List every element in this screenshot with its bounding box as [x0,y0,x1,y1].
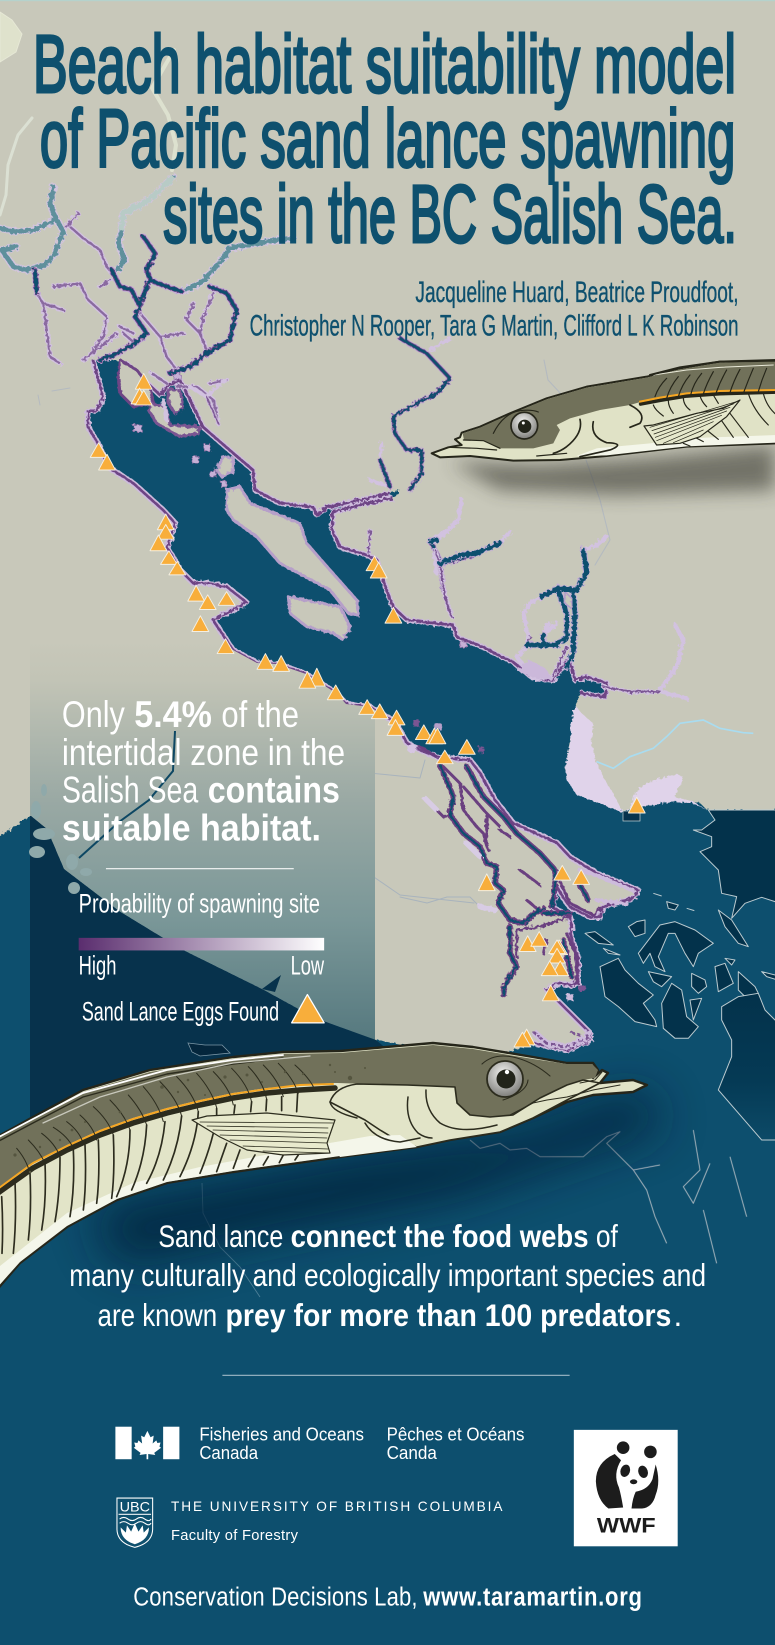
US mainland and San Juan Islands [585,810,775,1140]
Howe Sound and Burrard Inlet [430,500,687,698]
Fraser River delta [565,705,707,812]
legend [79,888,324,1027]
gill lines [553,405,642,457]
Lasqueti Island [288,597,350,640]
Quadra and Cortes Islands [118,360,153,407]
food web statement: prey for more than 100 predators [226,1298,671,1333]
pectoral fin [192,1113,335,1155]
logo: Fisheries and Oceans Canada: Fisheries and Oceans [199,1424,364,1445]
probability gradient bar [79,938,324,950]
logo: WWF [574,1430,678,1546]
northern fjord network [0,177,293,423]
upper sand lance fish [432,360,775,461]
belly band [0,1136,440,1290]
authors [250,276,739,343]
dorsal highlight [43,1056,310,1123]
logo: Fisheries and Oceans Canada: Pêches et Océans [387,1424,525,1445]
Decatur Island [690,998,702,1020]
brow lines [482,1056,550,1100]
lower sand lance fish [0,1043,647,1292]
fin rays [650,402,737,443]
upper river highlight [122,177,173,230]
central fjords [163,338,480,613]
orange lateral line [640,390,775,402]
key finding text: Only [62,694,125,735]
gill lines [330,1090,497,1142]
Washington mainland block [693,810,775,918]
upland rivers in the north [0,12,610,907]
food web statement [69,1219,706,1333]
San Juan Island [600,958,657,1027]
food web statement: are known [98,1298,217,1333]
icon: UBC shield [117,1498,153,1547]
mouth lines [510,1072,620,1115]
Gulf Islands channels [407,744,633,995]
key finding text [62,694,345,848]
top edge white stripe [0,1055,283,1138]
harbour box [623,811,640,821]
lower belly of head [330,1135,417,1157]
key finding text: suitable habitat. [62,807,321,848]
islands in the Strait of Georgia [118,360,358,640]
legend triangle [292,994,324,1023]
panel land tint [30,640,375,1040]
brow and mouth lines [448,410,567,456]
key finding text: Salish Sea [62,770,199,811]
inland rivers south of the strait [202,1183,260,1297]
title [33,18,737,260]
legend: Probability of spawning site [79,888,320,919]
southern tip speckle [533,1030,588,1047]
footer credit: www.taramartin.org [422,1583,642,1612]
Fidalgo and the south mainland [718,993,775,1140]
Fraser River [597,720,753,768]
icon: UBC shield: UBC [120,1500,150,1516]
dark band [0,1088,335,1195]
small pixel islets [133,373,467,648]
logo: Fisheries and Oceans Canada [115,1424,525,1464]
Fjord east of Burrard [516,660,553,680]
Blakely Island [692,973,707,993]
coastal island fragments [29,784,92,894]
Juan de Fuca inlet notch [262,975,281,992]
west and gulf shoreline [88,360,638,1050]
key finding text: 5.4% [134,694,212,735]
fin rays [200,1122,333,1153]
food web statement: of [596,1219,618,1254]
Pacific dark water inside panel [30,816,400,1130]
icon: Canadian flag [115,1427,179,1459]
logo: University of British Columbia: THE UNIVERSITY OF BRITISH COLUMBIA [171,1499,503,1514]
dark band under stripe [0,1058,283,1142]
Texada Island [227,487,358,615]
ribs [653,368,775,446]
pectoral fin [644,400,740,445]
sea polygon [0,360,775,1645]
Waldron Island [628,920,645,937]
food web statement: Sand lance [158,1219,283,1254]
Orcas Island [638,922,713,972]
speckle [13,1064,366,1173]
Lummi peninsula [718,910,748,947]
Lopez Island [662,983,698,1038]
belly highlight [577,435,775,456]
eye [487,1061,523,1097]
logo: Fisheries and Oceans Canada: Canada [199,1443,259,1464]
legend: Sand Lance Eggs Found [82,996,279,1027]
dorsal scale lines [17,1063,315,1173]
Saturna fragments [585,932,613,945]
gill cover [330,1080,600,1147]
Shaw Island [648,972,672,987]
logo: University of British Columbia [117,1498,503,1547]
small islets [603,893,775,997]
fish shadows [90,445,775,1265]
sand lance egg markers [90,373,645,1047]
lower divider [222,1375,570,1376]
logo: WWF: WWF [597,1515,656,1538]
footer credit [133,1583,642,1612]
food web statement: connect the food webs [291,1219,589,1254]
Olympic Peninsula coastline [470,1130,747,1263]
panel: key message backdrop [29,640,400,1130]
legend: High [79,950,116,981]
key finding text: contains [208,770,340,811]
logo: University of British Columbia: Faculty of Forestry [171,1528,299,1544]
fish back and head [463,361,775,448]
small dark island [188,1043,230,1056]
back [0,1045,598,1191]
food web statement: . [673,1298,682,1333]
top edge line [0,0,775,1]
panel divider [106,868,294,869]
fish body [432,360,775,461]
key finding text: of the [221,694,299,735]
orange lateral line [0,1084,333,1191]
logo: Fisheries and Oceans Canada: Canda [387,1443,437,1464]
pixel islets near Sidney [413,720,586,1001]
icon: panda [596,1441,658,1509]
eye [511,412,538,439]
key finding text: intertidal zone in the [62,732,345,773]
dark band under lateral line [641,392,775,404]
Alberni inlet [79,731,175,858]
body outline [0,1043,647,1292]
footer credit: Conservation Decisions Lab, [133,1583,418,1612]
legend: Low [291,950,324,981]
ribs below lateral line [2,1093,298,1253]
dorsal highlight [653,365,773,375]
